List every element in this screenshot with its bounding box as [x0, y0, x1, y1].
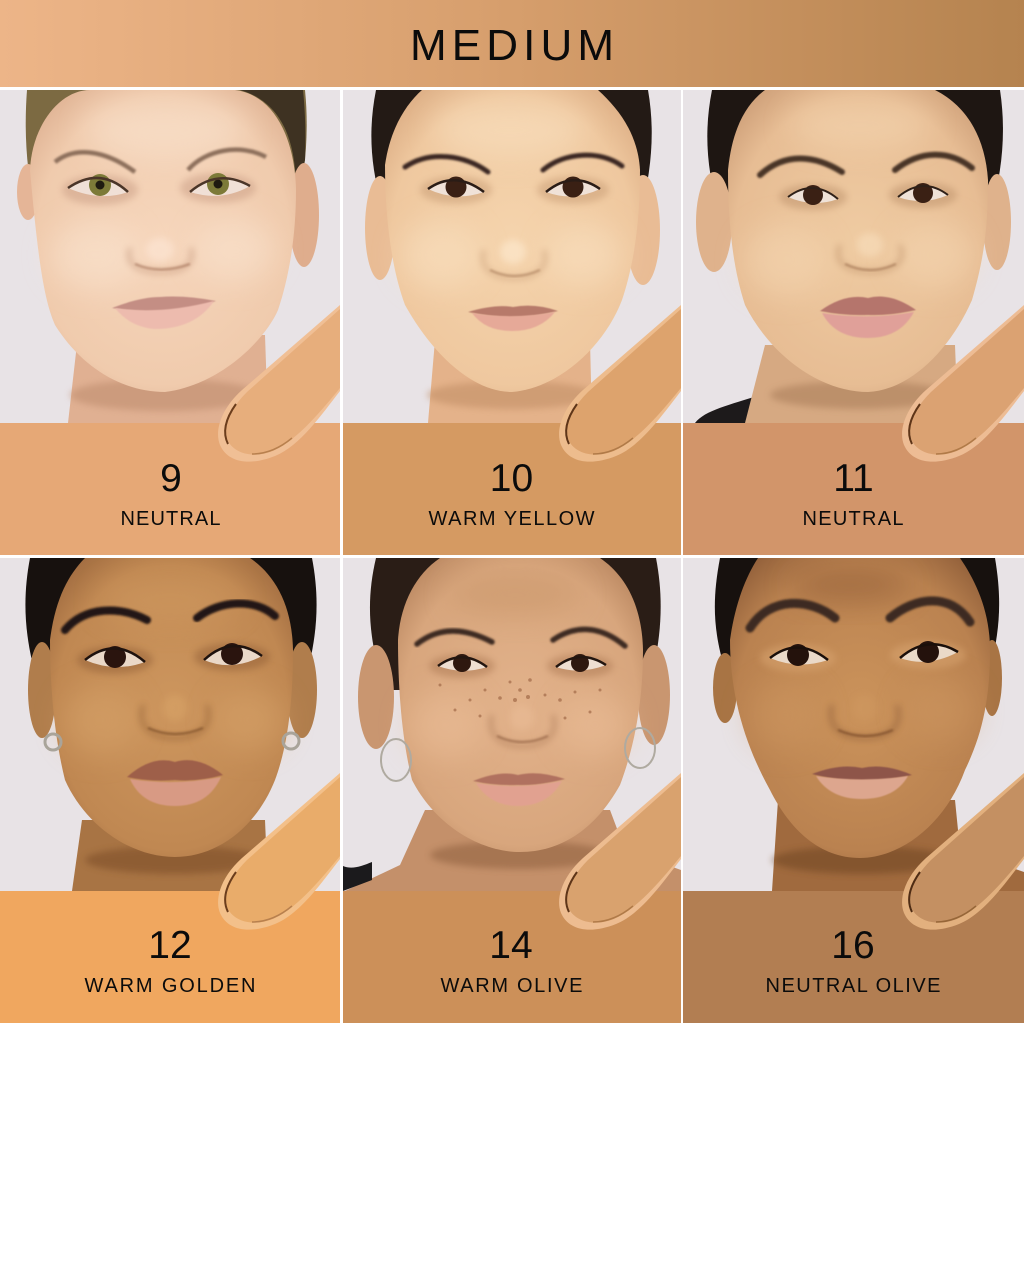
shade number: 9	[160, 457, 182, 500]
portrait: shade 12	[0, 558, 340, 891]
colour band: shade 10	[343, 423, 681, 555]
shade undertone: WARM YELLOW	[428, 508, 595, 530]
swatch: shade 11	[902, 305, 1024, 462]
portrait: shade 14	[343, 558, 681, 891]
colour band: shade 16	[683, 891, 1024, 1023]
swatch: shade 10	[559, 305, 681, 462]
shade number: 12	[148, 924, 192, 967]
colour band: shade 14	[343, 891, 681, 1023]
shade undertone: NEUTRAL OLIVE	[766, 975, 940, 997]
shade undertone: NEUTRAL	[120, 508, 220, 530]
portrait: shade 10	[343, 90, 681, 423]
header band: MEDIUM	[0, 0, 1024, 87]
colour band: shade 11	[683, 423, 1024, 555]
shade undertone: WARM GOLDEN	[84, 975, 256, 997]
panel: shade 14 warm olive	[343, 558, 681, 1023]
shade number: 14	[489, 924, 533, 967]
header band: MEDIUM: MEDIUM	[410, 21, 614, 70]
swatch: shade 16	[902, 773, 1024, 930]
swatch: shade 9	[218, 305, 340, 462]
portrait: shade 16	[683, 558, 1024, 891]
shade undertone: NEUTRAL	[802, 508, 904, 530]
swatch: shade 14	[559, 773, 681, 930]
panel: shade 9 neutral	[0, 90, 340, 555]
panel: shade 11 neutral	[683, 90, 1024, 555]
portrait: shade 9	[0, 90, 340, 423]
colour band: shade 9	[0, 423, 340, 555]
portrait: shade 11	[683, 90, 1024, 423]
shade number: 16	[831, 924, 875, 967]
colour band: shade 12	[0, 891, 340, 1023]
shade number: 11	[833, 457, 874, 500]
swatch: shade 12	[218, 773, 340, 930]
panel: shade 12 warm golden	[0, 558, 340, 1023]
shade undertone: WARM OLIVE	[440, 975, 582, 997]
panel: shade 16 neutral olive	[683, 558, 1024, 1023]
panel: shade 10 warm yellow	[343, 90, 681, 555]
shade number: 10	[490, 457, 533, 500]
